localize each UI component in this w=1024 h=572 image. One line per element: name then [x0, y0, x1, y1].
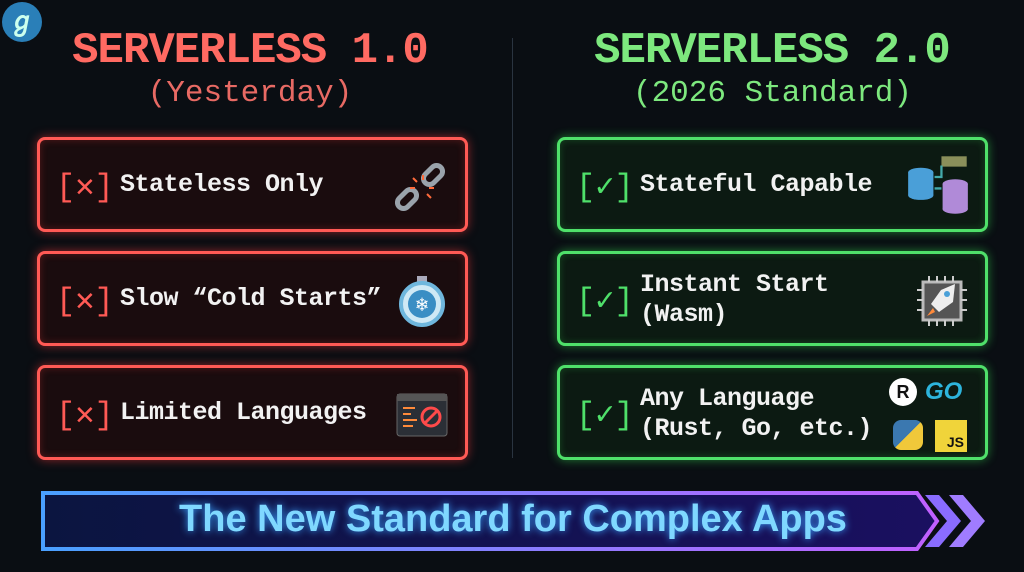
panel: any language: [557, 365, 988, 460]
panel: slow cold starts: ❄: [416, 295, 428, 318]
panel: any language: Any Language: [640, 384, 814, 413]
panel: instant start: Instant Start: [640, 270, 829, 299]
logo: [2, 2, 42, 42]
panel: limited languages: Limited Languages: [120, 398, 367, 427]
panel: slow cold starts: [✕]: [56, 283, 114, 320]
subtitle: yesterday: (Yesterday): [148, 76, 352, 111]
panel: stateful capable: [✓]: [576, 169, 634, 206]
panel: slow cold starts: Slow “Cold Starts”: [120, 284, 381, 313]
panel: any language: [✓]: [576, 397, 634, 434]
panel: instant start: (Wasm): [640, 300, 727, 329]
banner text: The New Standard for Complex Apps: [179, 498, 847, 540]
panel: slow cold starts: [37, 251, 468, 346]
icons: languages: [889, 378, 967, 452]
panel: instant start: [✓]: [576, 283, 634, 320]
panel: stateless only: [✕]: [56, 169, 114, 206]
divider: [512, 38, 513, 458]
panel: stateful capable: Stateful Capable: [640, 170, 872, 199]
panel: any language: (Rust, Go, etc.): [640, 414, 872, 443]
logo: ℊ: [9, 7, 35, 36]
panel: instant start: [557, 251, 988, 346]
banner: [41, 491, 985, 551]
icons: languages: GO: [925, 378, 962, 405]
title: serverless 1.0: SERVERLESS 1.0: [72, 26, 428, 76]
panel: stateless only: [37, 137, 468, 232]
icons: languages: R: [896, 382, 910, 402]
panel: limited languages: [37, 365, 468, 460]
panel: limited languages: [✕]: [56, 397, 114, 434]
subtitle: 2026 standard: (2026 Standard): [633, 76, 912, 111]
panel: stateless only: Stateless Only: [120, 170, 323, 199]
icons: languages: JS: [947, 434, 964, 450]
panel: stateful capable: [557, 137, 988, 232]
title: serverless 2.0: SERVERLESS 2.0: [594, 26, 950, 76]
